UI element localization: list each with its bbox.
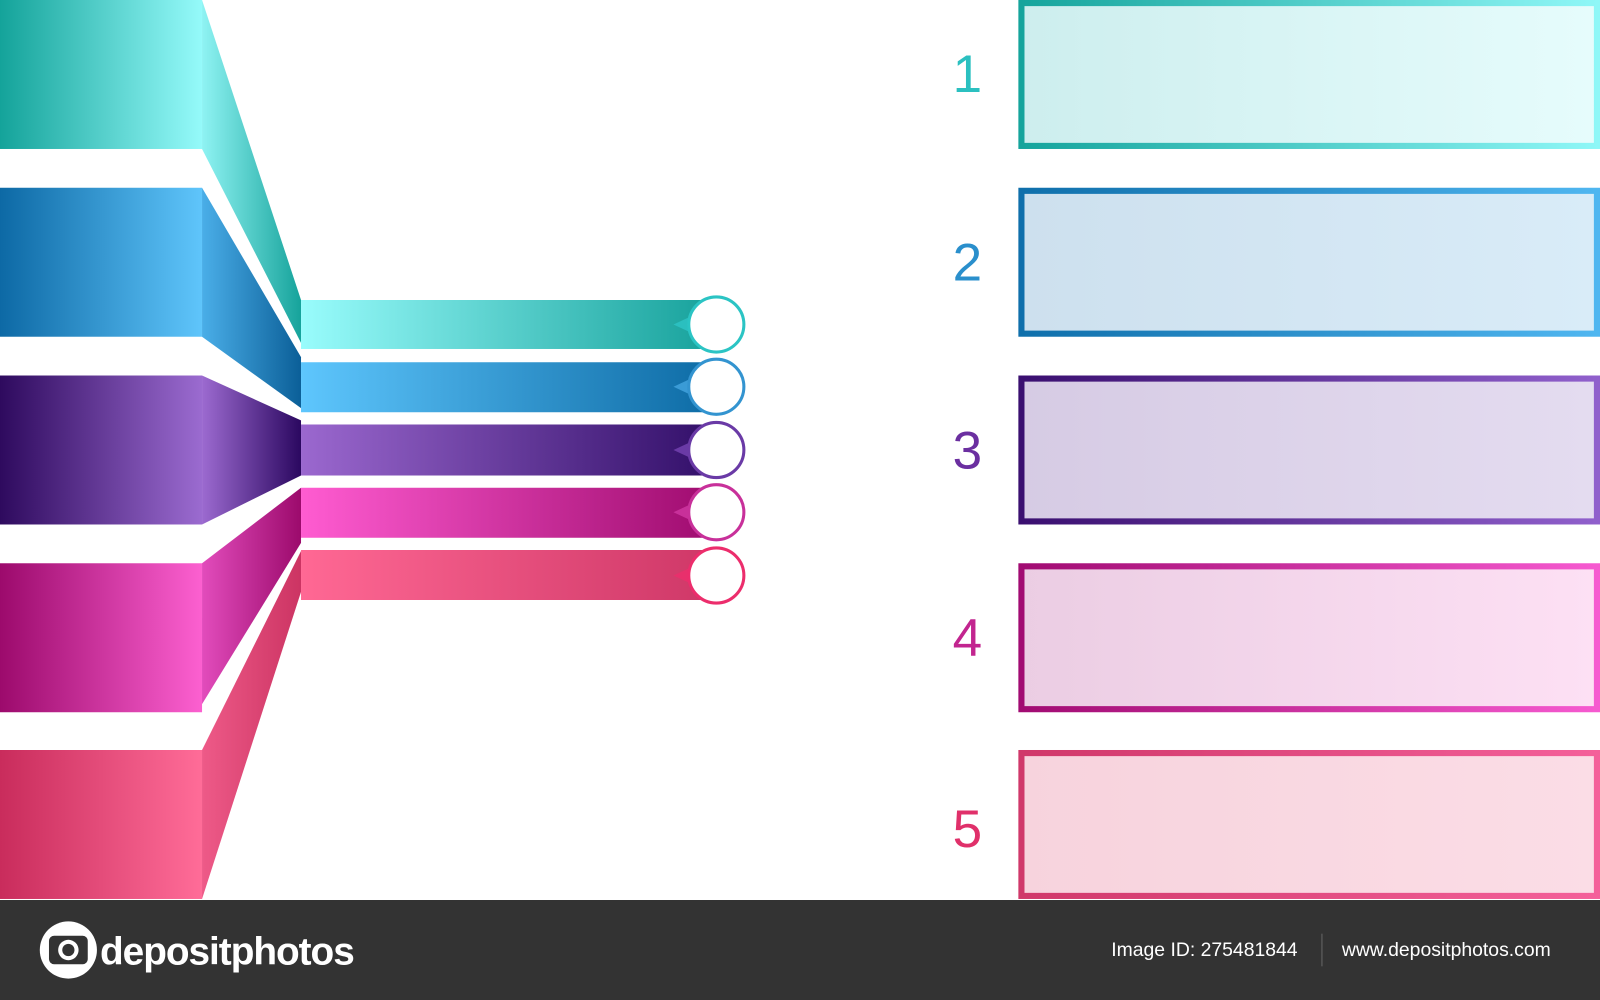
block 5	[0, 551, 301, 899]
item 3: 3	[953, 421, 982, 480]
block 2	[0, 188, 301, 408]
block 3	[0, 376, 301, 524]
footer bar	[0, 900, 1600, 1000]
item 4	[953, 566, 1597, 709]
bars with circle markers	[301, 297, 744, 603]
numbered text boxes	[953, 3, 1597, 896]
icon: camera logo	[40, 921, 97, 979]
bar 3	[301, 422, 744, 478]
bar 4	[301, 485, 744, 540]
bar 1	[301, 297, 744, 352]
block 1	[0, 0, 301, 343]
item 2	[953, 191, 1597, 334]
bar 5	[301, 548, 744, 603]
item 4: 4	[953, 609, 982, 668]
item 2: 2	[953, 234, 982, 293]
logo text: depositphotos	[100, 930, 354, 973]
block 4	[0, 488, 301, 712]
funnel: left blocks and connectors	[0, 0, 301, 899]
item 1: 1	[953, 45, 982, 104]
item 5	[953, 753, 1597, 896]
item 5: 5	[953, 800, 982, 859]
image id: Image ID: 275481844	[1111, 939, 1298, 961]
website: www.depositphotos.com	[1341, 939, 1551, 961]
item 1	[953, 3, 1597, 146]
bar 2	[301, 359, 744, 414]
item 3	[953, 379, 1597, 521]
